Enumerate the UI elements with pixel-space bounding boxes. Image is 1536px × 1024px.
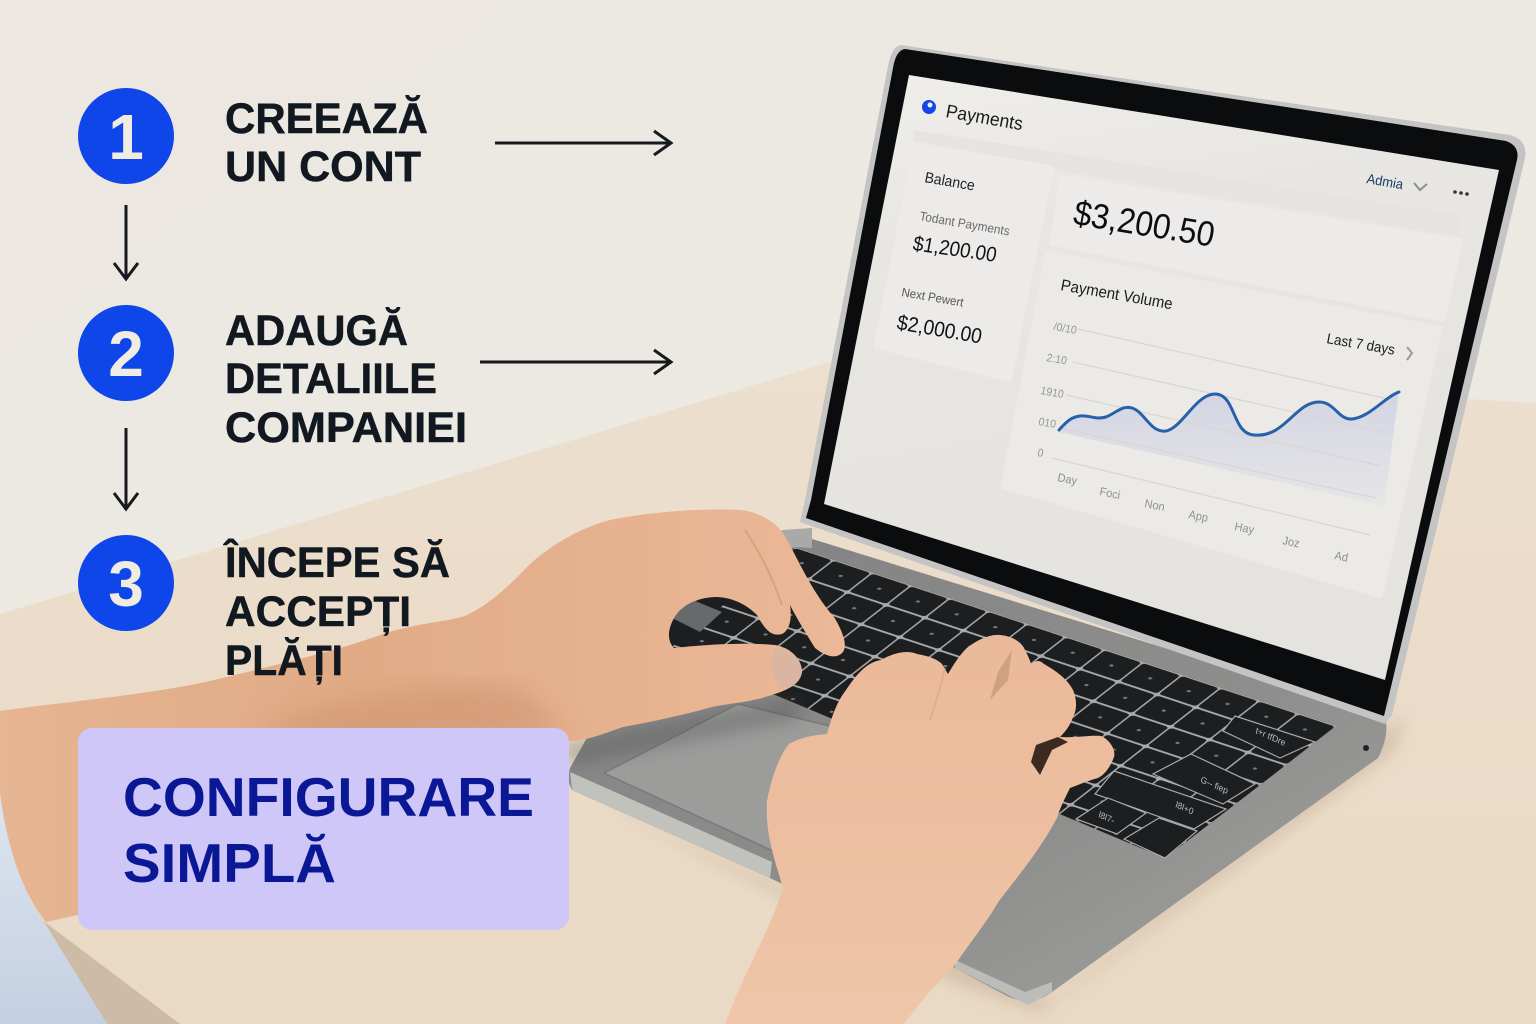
panel: balance list: Next Pewert [900, 285, 965, 310]
wide keys [672, 598, 1315, 858]
panel: balance list: Balance [923, 170, 976, 195]
port [1363, 745, 1369, 751]
thumb nail [771, 648, 802, 688]
chart grid [1052, 329, 1392, 535]
app header: Payments [944, 101, 1025, 134]
y axis labels: /0/10 [1052, 321, 1078, 337]
x axis labels: Non [1143, 498, 1166, 514]
keyboard [665, 547, 1337, 858]
x axis labels: App [1187, 509, 1209, 525]
header band [913, 130, 1462, 235]
panel: configurare simplă [78, 728, 569, 930]
y axis labels: 010 [1037, 416, 1057, 431]
key legends: l8l+0 [1174, 799, 1195, 817]
step 1 label: CREEAZĂ [225, 95, 428, 143]
x axis labels: Joz [1281, 535, 1301, 551]
silver corner [770, 528, 812, 560]
arm shadow [560, 695, 800, 765]
step 2 label: DETALIILE [225, 355, 437, 403]
laptop lid [800, 45, 1525, 724]
x axis labels [1056, 472, 1349, 565]
panel: configurare simplă: SIMPLĂ [123, 832, 336, 894]
y axis labels: 0 [1036, 447, 1044, 460]
finger gap shadows [1031, 737, 1068, 775]
y axis labels [1036, 321, 1078, 460]
step 2 [78, 305, 467, 452]
app header [922, 100, 1469, 196]
step 2 badge: 2 [108, 318, 144, 390]
forearm underside shading [270, 687, 570, 745]
key legends: G-- fiep [1199, 774, 1229, 796]
logo icon [922, 100, 936, 114]
y axis labels: 2:10 [1045, 352, 1068, 368]
desk surface [0, 362, 1536, 1024]
step 1 badge: 1 [108, 101, 144, 173]
arrow: step 1 to step 2 [114, 205, 138, 279]
laptop base [568, 528, 1386, 1005]
step 3 label: ACCEPȚI [225, 588, 411, 636]
panel: total balance: $3,200.50 [1070, 194, 1218, 255]
panel: configurare simplă: CONFIGURARE [123, 766, 534, 828]
step 1 label [225, 95, 428, 191]
step 2 label: COMPANIEI [225, 404, 467, 452]
step 2 badge [78, 305, 174, 401]
app header: Admia [1365, 171, 1405, 192]
screen [824, 75, 1499, 680]
laptop [568, 45, 1525, 1012]
step 3 label: PLĂȚI [225, 637, 343, 685]
step 2 label [225, 307, 467, 452]
panel: balance list [877, 145, 1051, 379]
chart line [1059, 392, 1399, 435]
panel: balance list: Todant Payments [918, 209, 1011, 239]
panel: total balance [1052, 177, 1460, 319]
left arm and hand [0, 509, 845, 922]
x axis labels: Foci [1098, 486, 1121, 502]
sleeve [0, 793, 180, 1024]
panel: payment volume chart [1004, 254, 1439, 595]
panel: payment volume chart: Payment Volume [1059, 277, 1174, 313]
step 3 badge [78, 535, 174, 631]
key legends: t+r tfDre [1254, 725, 1287, 748]
arrow: step 2 to step 3 [114, 428, 138, 509]
x axis labels: Hay [1233, 521, 1255, 537]
panel: balance list: $1,200.00 [911, 232, 998, 267]
laptop shadow [570, 715, 1405, 1012]
key legends: l8l7- [1097, 809, 1116, 826]
x axis labels: Ad [1333, 550, 1349, 565]
pale key under the left hand [672, 598, 722, 632]
step 1 label: UN CONT [225, 143, 421, 191]
step 3 label: ÎNCEPE SĂ [223, 538, 450, 587]
key legends [1097, 725, 1287, 826]
step 1 badge [78, 88, 174, 184]
step 3 [78, 535, 450, 685]
step 3 badge: 3 [108, 548, 144, 620]
panel: payment volume chart: Last 7 days [1325, 330, 1396, 358]
knuckle crease [745, 530, 782, 605]
arrow: step 2 to screen [480, 350, 671, 374]
arrow: step 1 to screen [495, 131, 671, 155]
right hand [725, 635, 1114, 1024]
base front edge [570, 772, 772, 878]
step 1 [78, 88, 428, 191]
panel: balance list: $2,000.00 [895, 312, 984, 349]
step 2 label: ADAUGĂ [225, 307, 408, 355]
step 3 label [223, 538, 450, 685]
chart area [1059, 392, 1399, 506]
x axis labels: Day [1056, 472, 1078, 488]
y axis labels: 1910 [1039, 385, 1065, 401]
trackpad [604, 704, 834, 851]
